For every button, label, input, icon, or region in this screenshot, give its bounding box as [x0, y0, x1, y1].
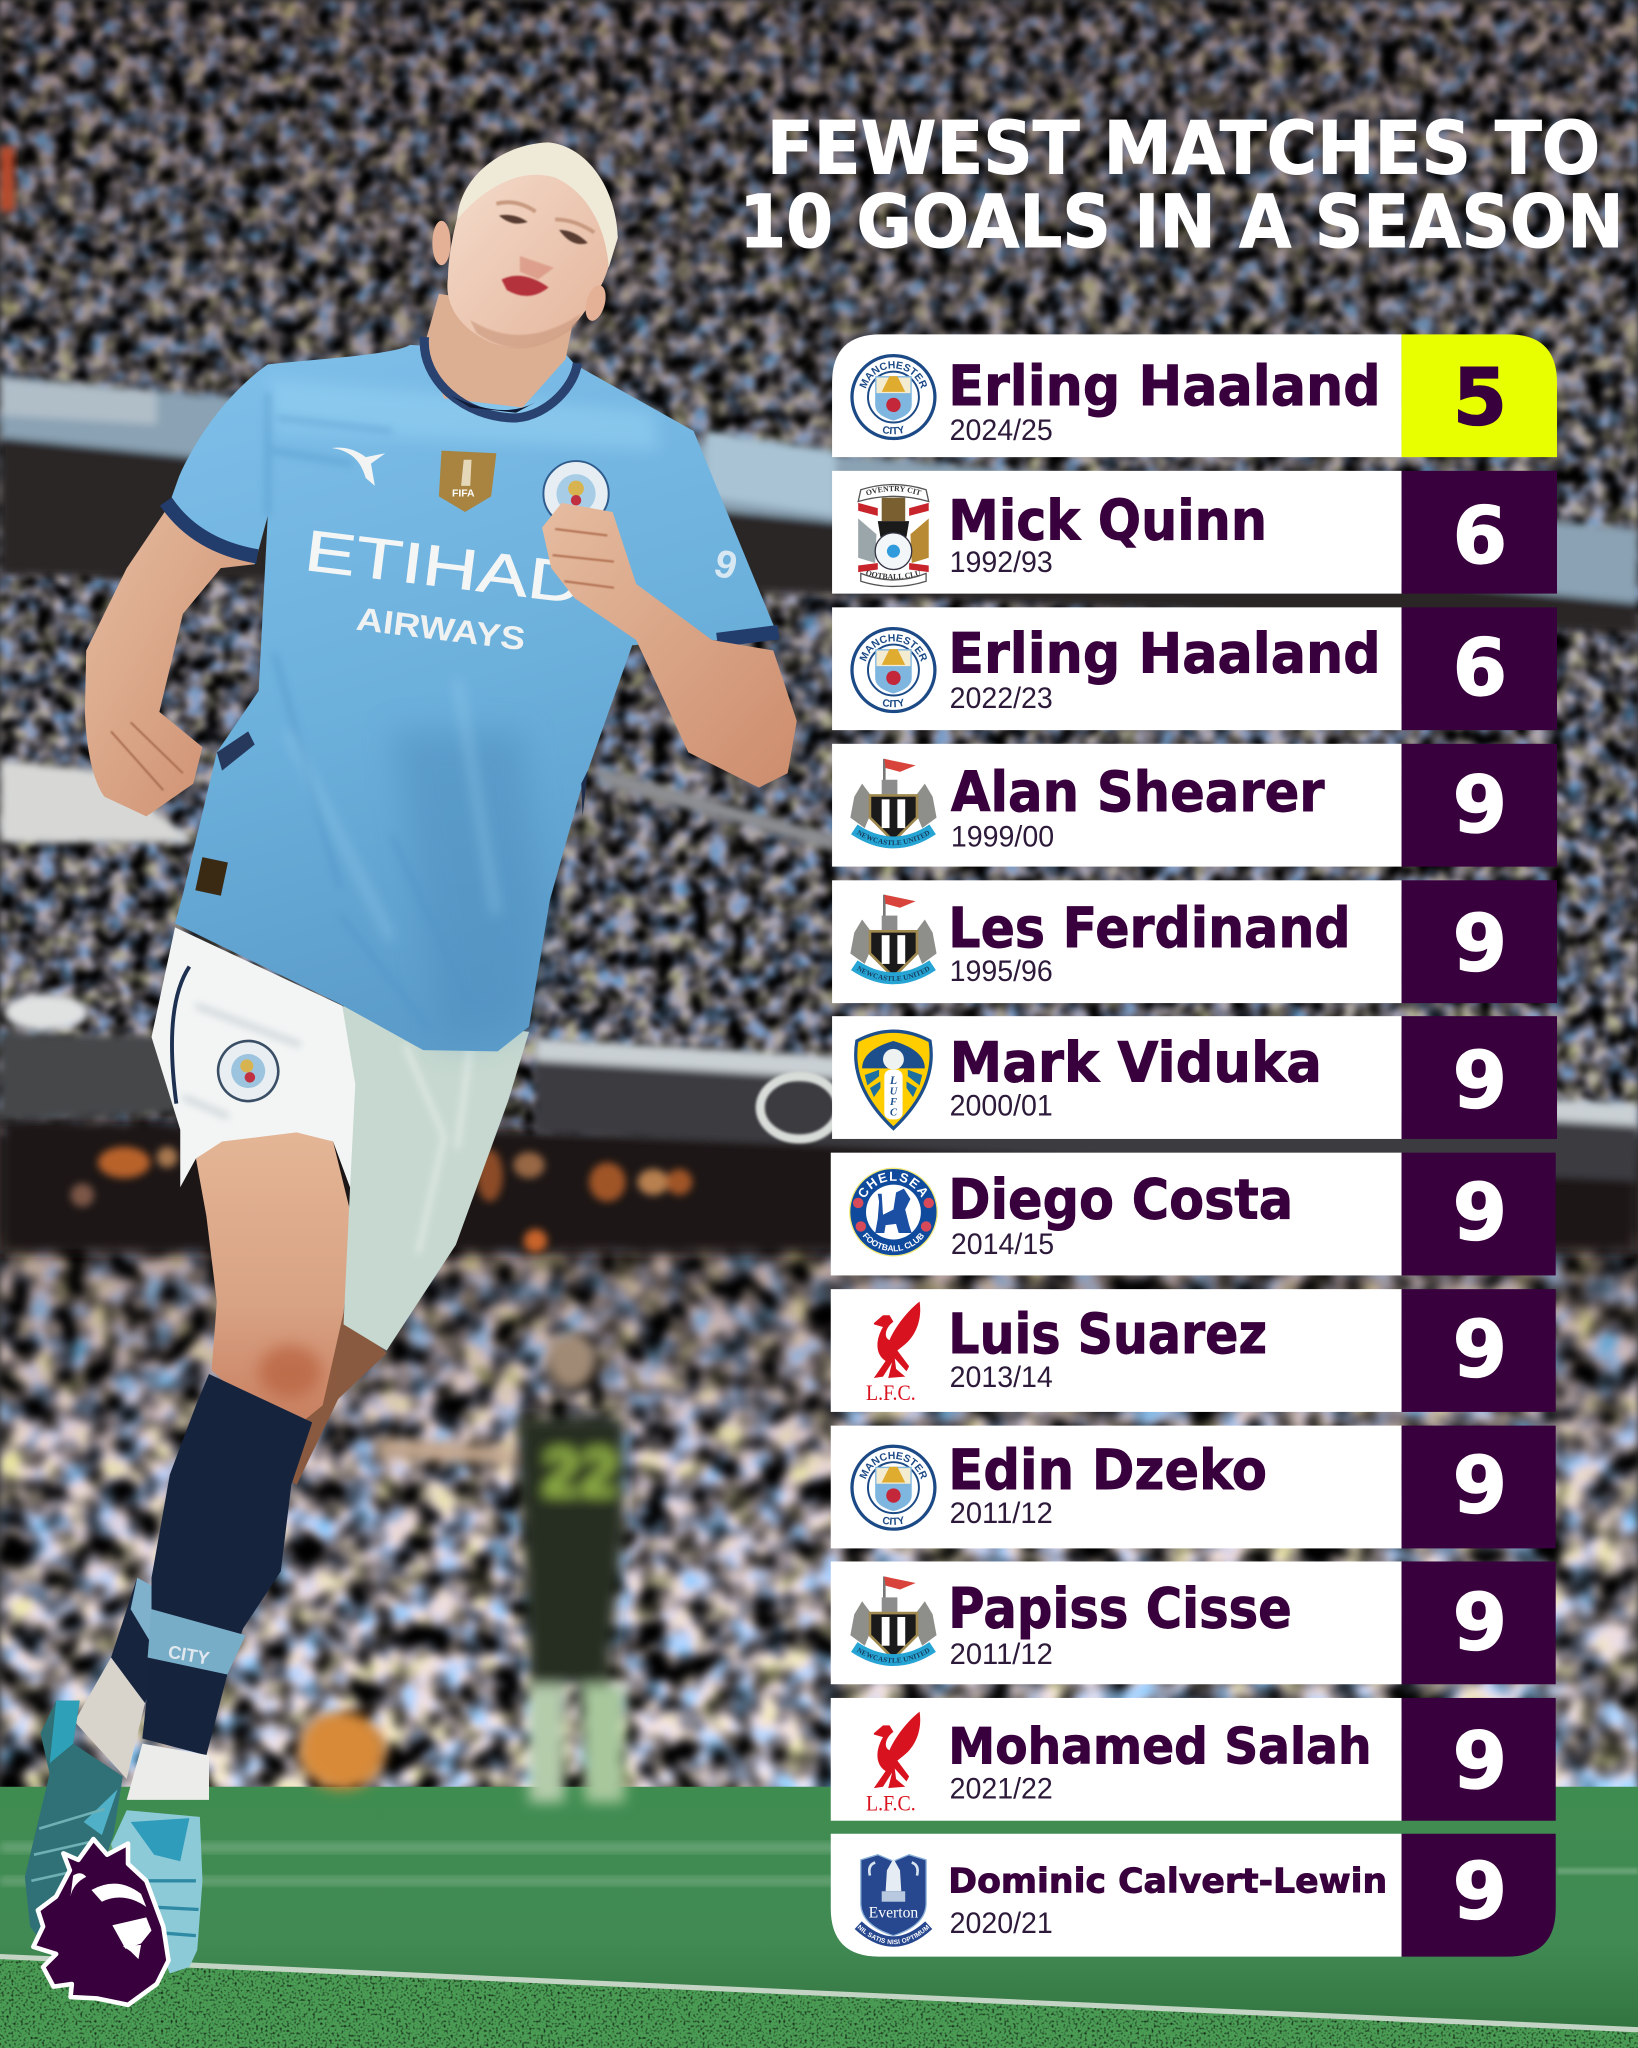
icon: Manchester City crest: MANCHESTER: [859, 1452, 927, 1480]
front leg skin: [196, 1130, 353, 1422]
icon: Newcastle United crest: NEWCASTLE UNITED: [856, 1648, 930, 1663]
sponsor text: [301, 519, 587, 657]
back leg: [25, 1578, 176, 1959]
pitch lines: [0, 1843, 1638, 2032]
name: Les Ferdinand: [948, 896, 1351, 960]
front boot: [111, 1810, 202, 1974]
front sock: [142, 1374, 312, 1755]
name: Alan Shearer: [951, 760, 1325, 824]
icon: Everton crest: Everton: [869, 1904, 918, 1921]
distant player: 22: [542, 1436, 618, 1511]
stadium sign: [760, 1076, 839, 1139]
icon: Leeds United crest: L: [889, 1074, 897, 1087]
concourse and dark band: [0, 1117, 1638, 1254]
season: 2022/23: [950, 682, 1053, 715]
icon: Newcastle United crest: [850, 1576, 936, 1666]
red flare at left: [0, 146, 14, 212]
matches: 5: [1453, 352, 1507, 443]
distant player: [379, 1332, 624, 1802]
matches: 9: [1453, 1168, 1507, 1259]
season: 1995/96: [950, 955, 1053, 988]
icon: Manchester City crest: [850, 1444, 937, 1531]
shirt shading: [195, 379, 660, 1045]
title: FEWEST MATCHES TO: [767, 107, 1600, 192]
back calf: [285, 1313, 387, 1485]
icon: Manchester City crest: [850, 627, 937, 714]
right arm: [542, 503, 797, 788]
name: Diego Costa: [948, 1168, 1293, 1232]
matches: 9: [1453, 1036, 1507, 1127]
icon: Newcastle United crest: [850, 758, 936, 848]
head: [447, 163, 614, 347]
icon: Coventry City crest: FOOTBALL CLUB: [866, 570, 920, 580]
hair: [457, 142, 618, 268]
shorts badge: [211, 1034, 285, 1108]
matches: 9: [1453, 898, 1507, 989]
puma logo: [332, 448, 385, 486]
name: Papiss Cisse: [948, 1576, 1292, 1640]
row: Luis Suarez 2013/14: [831, 1289, 1556, 1412]
season: 2000/01: [950, 1089, 1053, 1122]
neck: [425, 294, 575, 408]
name: Edin Dzeko: [948, 1438, 1267, 1502]
icon: Leeds United crest: U: [890, 1087, 898, 1098]
icon: Everton crest: NIL SATIS NISI OPTIMUM: [858, 1924, 930, 1944]
icon: Newcastle United crest: NEWCASTLE UNITED: [856, 966, 930, 981]
sleeve cuffs: [166, 502, 779, 640]
icon: Liverpool crest: [866, 1302, 920, 1405]
fist lines: [553, 529, 614, 588]
city chest badge: [543, 461, 609, 526]
middle crowd: [0, 562, 1638, 1136]
row: Dominic Calvert-Lewin 2020/21: [831, 1834, 1556, 1957]
icon: Newcastle United crest: [850, 894, 936, 984]
upper crowd: [0, 0, 1638, 679]
left hand lines: [111, 722, 183, 790]
shorts: [152, 927, 529, 1351]
title: [739, 107, 1624, 265]
row: Alan Shearer 1999/00: [832, 744, 1557, 867]
matches: 9: [1453, 1716, 1507, 1807]
sock text: CITY: [167, 1641, 211, 1669]
icon: Leeds United crest: F: [889, 1097, 897, 1108]
row: Mick Quinn 1992/93: [832, 470, 1557, 594]
icon: Chelsea crest: [849, 1168, 938, 1256]
matches: 6: [1453, 623, 1507, 714]
row: Diego Costa 2014/15: [830, 1152, 1556, 1276]
orange lights: [71, 1147, 692, 1253]
icon: Liverpool crest: [866, 1712, 920, 1815]
icon: Leeds United crest: [856, 1031, 931, 1128]
icon: Coventry City crest: COVENTRY CITY: [866, 486, 922, 496]
matches: 9: [1453, 1578, 1507, 1669]
inner collar: [451, 396, 536, 413]
season: 2014/15: [951, 1228, 1054, 1261]
collar: [424, 337, 577, 418]
icon: Everton crest: [856, 1855, 931, 1946]
season: 2024/25: [950, 414, 1053, 447]
name: Mohamed Salah: [948, 1716, 1372, 1775]
icon: Manchester City crest: [850, 354, 937, 440]
row: Les Ferdinand 1995/96: [832, 880, 1557, 1004]
name: Mark Viduka: [950, 1030, 1322, 1094]
season: 2011/12: [950, 1638, 1053, 1671]
row: Papiss Cisse 2011/12: [830, 1561, 1556, 1684]
icon: Premier League lion logo: [33, 1839, 169, 2005]
season: 1992/93: [950, 546, 1053, 579]
matches: 9: [1453, 1847, 1507, 1938]
player: Erling Haaland: [25, 142, 797, 1974]
matches: 9: [1453, 1440, 1507, 1531]
row: Edin Dzeko 2011/12: [830, 1426, 1556, 1548]
matches: 9: [1453, 1305, 1507, 1396]
season: 2013/14: [950, 1361, 1053, 1394]
season: 2020/21: [950, 1907, 1053, 1940]
icon: Manchester City crest: MANCHESTER: [859, 361, 927, 389]
icon: Leeds United crest: C: [890, 1107, 898, 1118]
ears: [432, 221, 609, 323]
pitch: [0, 1787, 1638, 2048]
knee shading: [259, 1345, 321, 1398]
name: Dominic Calvert-Lewin: [948, 1862, 1387, 1902]
season: 1999/00: [951, 820, 1054, 853]
icon: Liverpool crest: L.F.C.: [866, 1790, 916, 1815]
season: 2011/12: [950, 1497, 1053, 1530]
grass texture: [0, 1955, 1638, 2048]
season: 2021/22: [950, 1773, 1053, 1806]
row: Erling Haaland 2022/23: [832, 607, 1557, 730]
icon: Manchester City crest: CITY: [882, 698, 904, 708]
shirt: [165, 345, 779, 1051]
name: Luis Suarez: [948, 1302, 1267, 1366]
icon: Chelsea crest: FOOTBALL CLUB: [862, 1232, 924, 1252]
icon: Liverpool crest: L.F.C.: [866, 1380, 916, 1405]
name: Erling Haaland: [948, 622, 1381, 686]
stand tier band: [0, 376, 1638, 852]
name: Erling Haaland: [948, 354, 1381, 418]
icon: Manchester City crest: CITY: [882, 1516, 904, 1525]
left arm: [85, 512, 255, 816]
icon: Manchester City crest: CITY: [882, 426, 904, 434]
FIFA badge: FIFA: [452, 488, 475, 499]
orange seat blob: [299, 1711, 385, 1789]
lower crowd: [0, 1234, 1638, 1796]
icon: Chelsea crest: CHELSEA: [858, 1172, 928, 1198]
face features: [470, 202, 594, 348]
icon: Coventry City crest: [857, 484, 930, 588]
name: Mick Quinn: [948, 488, 1267, 552]
FIFA badge: [439, 451, 496, 512]
sponsor text: AIRWAYS: [354, 600, 527, 657]
matches: 6: [1453, 491, 1507, 582]
row: Mark Viduka 2000/01: [832, 1016, 1557, 1139]
icon: Manchester City crest: MANCHESTER: [859, 634, 927, 662]
matches: 9: [1453, 760, 1507, 851]
front ankle: [127, 1744, 209, 1800]
table of players: [830, 334, 1557, 1957]
sleeve numeral: 9: [710, 542, 742, 589]
row: Erling Haaland 2024/25: [832, 334, 1557, 458]
icon: Newcastle United crest: NEWCASTLE UNITED: [856, 830, 930, 846]
row: Mohamed Salah 2021/22: [831, 1698, 1556, 1821]
sponsor text: ETIHAD: [301, 519, 587, 616]
